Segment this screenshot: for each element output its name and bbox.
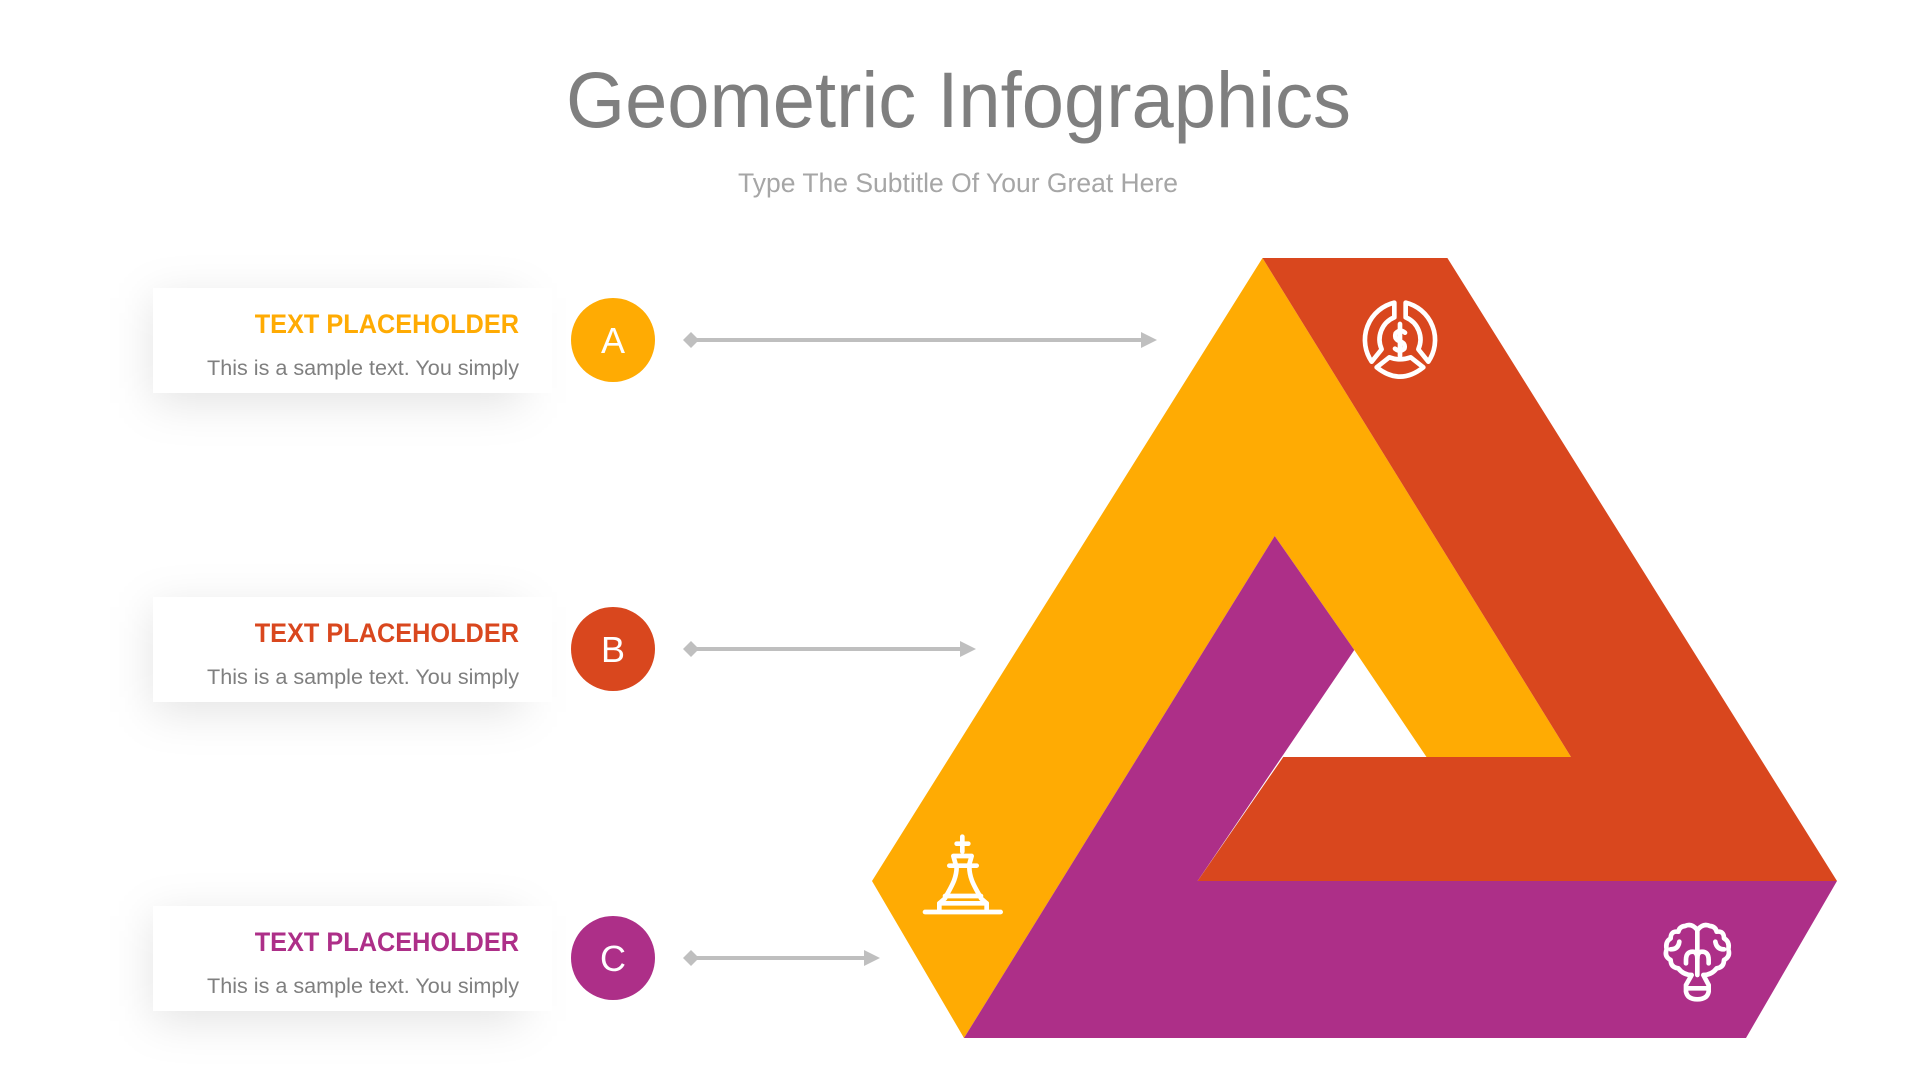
icon: chess king (925, 837, 1001, 912)
badge: B (571, 607, 655, 691)
text: item B: This is a sample text. You simply (207, 666, 520, 689)
title: Geometric Infographics (566, 55, 1351, 144)
heading: item C: TEXT PLACEHOLDER (255, 927, 519, 957)
subtitle: Type The Subtitle Of Your Great Here (738, 168, 1178, 198)
text: item A: This is a sample text. You simply (207, 357, 520, 380)
segment: purple band (964, 536, 1837, 1038)
heading: item B: TEXT PLACEHOLDER (255, 618, 519, 648)
badge: B: B (601, 629, 625, 670)
panel: item C (153, 906, 552, 1021)
panel: item A (153, 288, 552, 403)
icon: dollar target (1365, 303, 1435, 377)
text: item C: This is a sample text. You simply (207, 975, 520, 998)
arrow: B (683, 641, 976, 657)
arrow: A (683, 332, 1157, 348)
heading: item A: TEXT PLACEHOLDER (255, 309, 519, 339)
badge: A: A (601, 320, 625, 361)
chart: impossible triangle (872, 258, 1837, 1038)
segment: red band (1198, 258, 1837, 881)
segment: orange band (872, 258, 1571, 1038)
icon: brain bulb (1666, 925, 1729, 999)
arrow: C (683, 950, 880, 966)
badge: C: C (600, 938, 626, 979)
panel: item B (153, 597, 552, 712)
badge: C (571, 916, 655, 1000)
badge: A (571, 298, 655, 382)
